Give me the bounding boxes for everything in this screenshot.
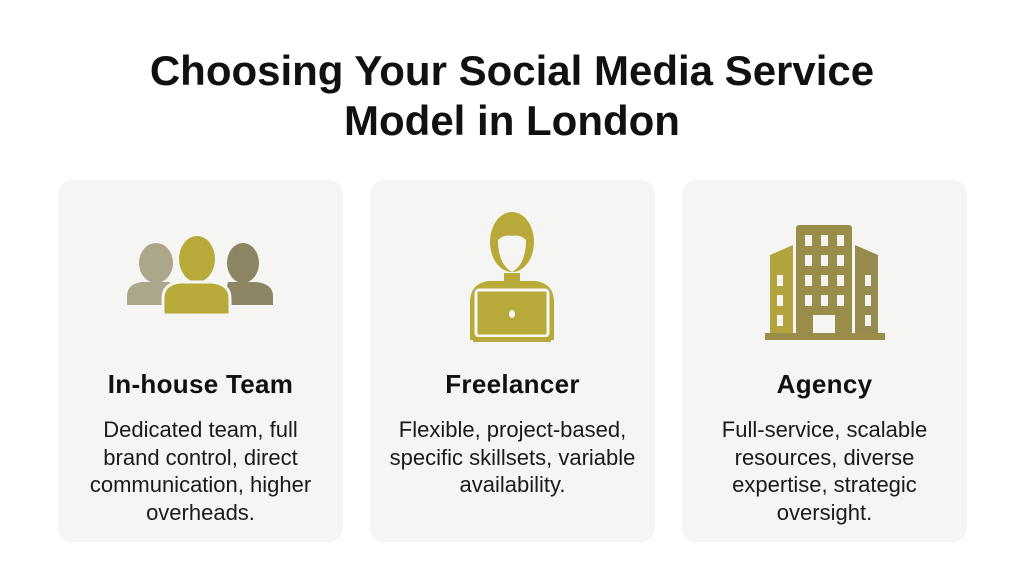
text block: brand control, direct xyxy=(103,444,298,470)
text block: availability. xyxy=(460,472,565,497)
text block: Full-service, scalable xyxy=(722,417,927,442)
title: Choosing Your Social Media Service xyxy=(150,47,874,94)
text block xyxy=(90,417,311,524)
text block xyxy=(722,417,927,524)
icon: freelancer with laptop xyxy=(470,212,554,342)
text block: Dedicated team, full xyxy=(103,417,298,442)
text block: specific skillsets, variable xyxy=(390,444,635,470)
icon: building xyxy=(765,225,885,340)
panel: in-house team xyxy=(58,180,343,542)
text block: communication, higher xyxy=(90,472,311,497)
heading: Freelancer xyxy=(445,369,580,399)
heading: Agency xyxy=(777,369,872,399)
panel: freelancer xyxy=(370,180,655,542)
text block xyxy=(390,417,635,497)
title xyxy=(150,47,874,144)
title: Model in London xyxy=(344,97,680,144)
text block: overheads. xyxy=(146,500,255,524)
heading: In-house Team xyxy=(108,369,293,399)
text block: resources, diverse xyxy=(735,444,914,470)
icon: team xyxy=(127,236,273,314)
text block: Flexible, project-based, xyxy=(399,417,626,442)
panel: agency xyxy=(682,180,967,542)
text block: oversight. xyxy=(777,500,872,524)
text block: expertise, strategic xyxy=(732,472,917,497)
